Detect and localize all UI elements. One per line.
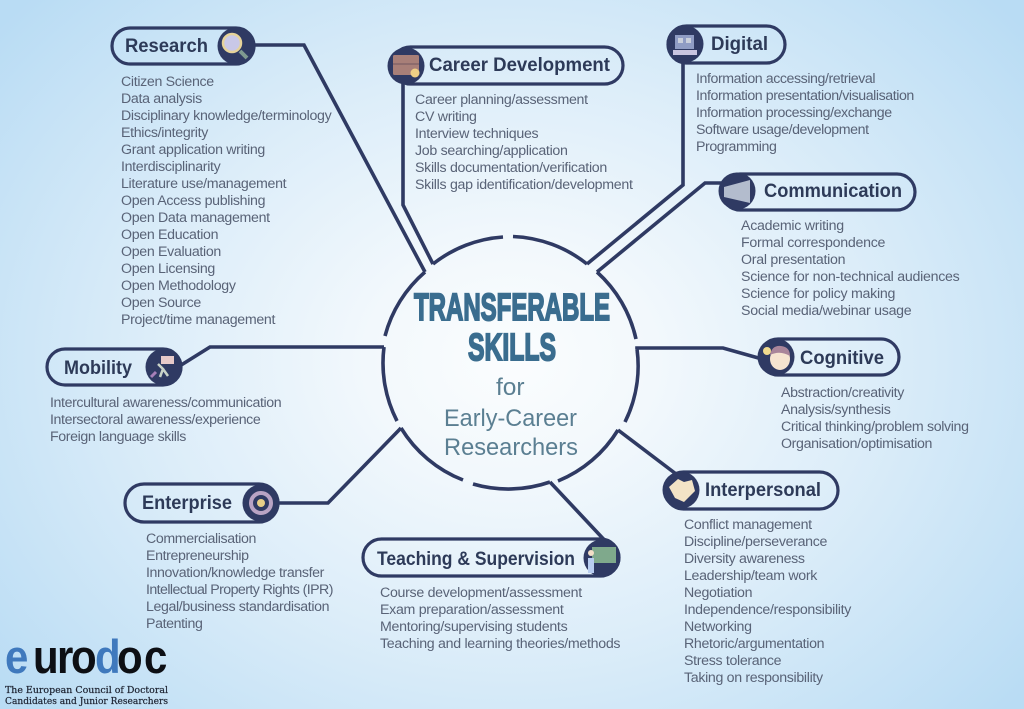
interpersonal list: Taking on responsibility	[684, 670, 824, 686]
career heading pill	[392, 47, 623, 84]
eurodoc tagline: The European Council of Doctoral	[5, 685, 168, 696]
enterprise title: Enterprise	[142, 493, 232, 514]
interpersonal heading pill	[665, 472, 838, 509]
research list: Disciplinary knowledge/terminology	[121, 108, 333, 124]
eurodoc tagline: Candidates and Junior Researchers	[5, 696, 168, 707]
communication list: Formal correspondence	[741, 235, 886, 251]
panel: interpersonal	[662, 472, 855, 686]
career list: Skills documentation/verification	[415, 160, 607, 176]
research list: Open Source	[121, 295, 201, 311]
panel: mobility	[47, 348, 285, 445]
communication list: Science for policy making	[741, 286, 895, 302]
career list: Job searching/application	[415, 143, 568, 159]
career list: Skills gap identification/development	[415, 177, 633, 193]
teaching title: Teaching & Supervision	[377, 549, 575, 570]
mobility heading pill	[47, 349, 181, 385]
icon: head with lightbulb	[758, 338, 794, 376]
icon: handshake	[662, 472, 700, 508]
teaching list: Exam preparation/assessment	[380, 602, 564, 618]
communication list: Science for non-technical audiences	[741, 269, 960, 285]
panel: cognitive	[758, 338, 972, 452]
panel: communication	[718, 172, 963, 319]
digital title: Digital	[711, 34, 768, 55]
icon: magnifying glass	[218, 28, 254, 64]
eurodoc wordmark: eurodoc	[5, 632, 167, 684]
central circle ring with connectors	[178, 45, 762, 546]
research list: Citizen Science	[121, 74, 214, 90]
career title: Career Development	[429, 55, 611, 76]
career list: Interview techniques	[415, 126, 539, 142]
central title	[414, 287, 610, 461]
mobility title: Mobility	[64, 358, 132, 379]
interpersonal title: Interpersonal	[705, 480, 821, 501]
cognitive list: Organisation/optimisation	[781, 436, 932, 452]
digital list: Information processing/exchange	[696, 105, 892, 121]
logo: eurodoc	[5, 632, 168, 707]
title: transferable skills	[414, 287, 610, 369]
panel: enterprise	[125, 484, 336, 632]
research list: Open Education	[121, 227, 218, 243]
subtitle: for early-career researchers: for	[496, 374, 525, 401]
research list: Open Data management	[121, 210, 270, 226]
research list: Data analysis	[121, 91, 202, 107]
research list: Open Evaluation	[121, 244, 221, 260]
cognitive title: Cognitive	[800, 348, 884, 369]
subtitle: for early-career researchers	[444, 374, 578, 461]
icon: megaphone	[718, 172, 756, 210]
research list: Open Access publishing	[121, 193, 265, 209]
research list: Ethics/integrity	[121, 125, 209, 141]
teaching heading pill	[363, 539, 619, 576]
interpersonal list: Discipline/perseverance	[684, 534, 827, 550]
research list: Open Methodology	[121, 278, 237, 294]
icon: briefcase	[388, 48, 424, 84]
interpersonal list: Independence/responsibility	[684, 602, 852, 618]
panel: research	[112, 28, 335, 328]
teaching list: Mentoring/supervising students	[380, 619, 568, 635]
research list: Literature use/management	[121, 176, 287, 192]
enterprise list: Innovation/knowledge transfer	[146, 565, 325, 581]
research list: Grant application writing	[121, 142, 265, 158]
icon: teacher at board	[584, 540, 620, 576]
interpersonal list: Leadership/team work	[684, 568, 818, 584]
panel: digital	[666, 26, 917, 155]
icon: gear	[242, 484, 280, 522]
enterprise list: Patenting	[146, 616, 202, 632]
icon: laptop	[666, 26, 704, 62]
communication list: Academic writing	[741, 218, 844, 234]
teaching list: Teaching and learning theories/methods	[380, 636, 620, 652]
cognitive list: Analysis/synthesis	[781, 402, 891, 418]
interpersonal list: Networking	[684, 619, 752, 635]
research heading pill	[112, 28, 254, 64]
communication heading pill	[722, 174, 915, 210]
digital list: Information accessing/retrieval	[696, 71, 875, 87]
cognitive list: Critical thinking/problem solving	[781, 419, 969, 435]
enterprise list: Entrepreneurship	[146, 548, 249, 564]
subtitle: for early-career researchers: Early-Career	[444, 405, 577, 432]
interpersonal list: Rhetoric/argumentation	[684, 636, 824, 652]
communication title: Communication	[764, 181, 902, 202]
career list: CV writing	[415, 109, 477, 125]
mobility list: Intersectoral awareness/experience	[50, 412, 261, 428]
research list: Project/time management	[121, 312, 275, 328]
interpersonal list: Stress tolerance	[684, 653, 782, 669]
cognitive list: Abstraction/creativity	[781, 385, 905, 401]
digital list: Software usage/development	[696, 122, 869, 138]
mobility list: Foreign language skills	[50, 429, 186, 445]
icon: traveller	[146, 348, 182, 386]
communication list: Social media/webinar usage	[741, 303, 912, 319]
digital list: Information presentation/visualisation	[696, 88, 914, 104]
research list: Interdisciplinarity	[121, 159, 222, 175]
mobility list: Intercultural awareness/communication	[50, 395, 281, 411]
title: transferable skills: SKILLS	[468, 327, 556, 369]
interpersonal list: Diversity awareness	[684, 551, 805, 567]
interpersonal list: Negotiation	[684, 585, 752, 601]
teaching list: Course development/assessment	[380, 585, 582, 601]
communication list: Oral presentation	[741, 252, 845, 268]
enterprise heading pill	[125, 484, 278, 522]
enterprise list: Legal/business standardisation	[146, 599, 329, 615]
research title: Research	[125, 36, 208, 57]
enterprise list: Commercialisation	[146, 531, 256, 547]
career list: Career planning/assessment	[415, 92, 588, 108]
research list: Open Licensing	[121, 261, 215, 277]
interpersonal list: Conflict management	[684, 517, 812, 533]
eurodoc tagline	[5, 685, 168, 707]
panel: career development	[388, 47, 633, 193]
panel: teaching and supervision	[363, 539, 620, 652]
enterprise list: Intellectual Property Rights (IPR)	[146, 582, 333, 598]
cognitive heading pill	[760, 339, 899, 375]
title: transferable skills: TRANSFERABLE	[414, 287, 610, 329]
digital heading pill	[668, 26, 785, 63]
digital list: Programming	[696, 139, 776, 155]
subtitle: for early-career researchers: Researchers	[444, 434, 578, 461]
